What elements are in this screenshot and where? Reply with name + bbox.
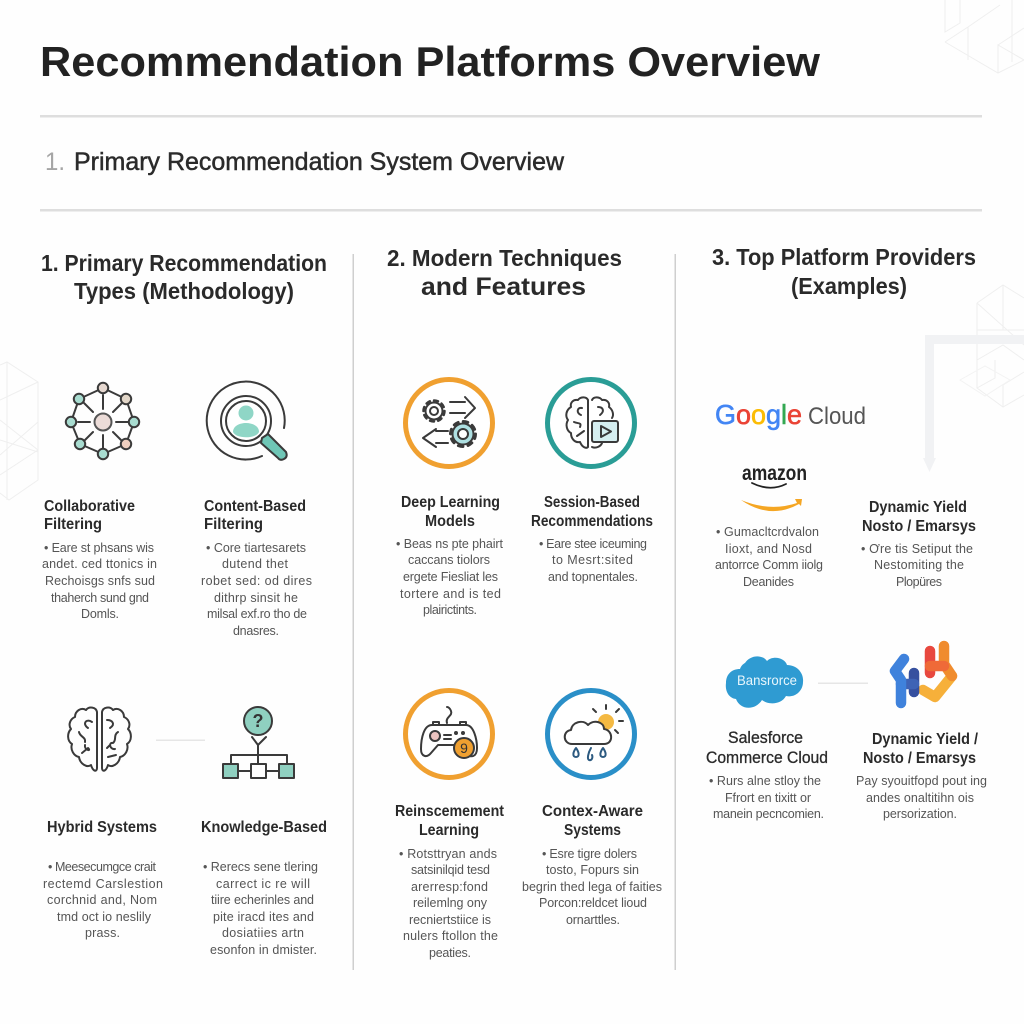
text: knowledge-based description: carrect ic re will — [216, 877, 310, 891]
text: knowledge-based description: tiire echerinles and — [211, 893, 314, 907]
text: hybrid systems description: prass. — [85, 926, 120, 940]
icon: knowledge-based decision tree — [223, 707, 294, 778]
logo: salesforce cloud — [726, 656, 803, 708]
text: dynamic yield second description: persorization. — [883, 807, 957, 821]
text: hybrid systems description: rectemd Carslestion — [43, 877, 163, 891]
card heading: session-based recommendations — [531, 494, 653, 530]
text: collaborative filtering description: andet. ced ttonics in — [42, 557, 157, 571]
text: dynamic yield description: Nestomiting the — [874, 558, 964, 572]
text: context-aware description: ornarttles. — [566, 913, 620, 927]
icon: reinforcement learning controller: 9 — [460, 740, 468, 756]
card heading: reinforcement learning: Reinscemement — [395, 803, 504, 820]
text: collaborative filtering description: Domls. — [81, 607, 119, 621]
card heading: dynamic yield nosto emarsys: Nosto / Emarsys — [862, 518, 976, 535]
text: hybrid systems description: • Meesecumgce crait — [48, 860, 157, 874]
card heading: context-aware systems: Systems — [564, 822, 621, 839]
heading: column 1 — [41, 250, 327, 304]
card heading: hybrid systems: Hybrid Systems — [47, 819, 157, 836]
card heading: salesforce commerce cloud: Commerce Cloud — [706, 749, 828, 767]
subtitle: Primary Recommendation System Overview — [74, 148, 565, 176]
text: salesforce description — [709, 774, 824, 821]
icon: deep learning gears and arrows — [406, 380, 492, 466]
logo: salesforce cloud: Bansrorce — [737, 672, 797, 688]
card heading: session-based recommendations: Session-Based — [544, 494, 640, 511]
icon: context-aware weather — [548, 690, 634, 778]
icon: content-based magnifier — [207, 382, 287, 460]
text: context-aware description — [522, 847, 662, 927]
card heading: content-based filtering — [204, 498, 306, 533]
text: reinforcement learning description: nulers ftollon the — [403, 929, 498, 943]
logo: multicolour dynamic yield mark — [895, 646, 952, 703]
text: reinforcement learning description: arerresp:fond — [411, 880, 488, 894]
text: collaborative filtering description — [42, 541, 157, 621]
text: knowledge-based description — [203, 860, 318, 957]
icon: reinforcement learning controller — [406, 690, 492, 778]
panel: modern techniques and features — [387, 245, 662, 960]
text: amazon description: antorrce Comm iiolg — [715, 558, 823, 572]
text: deep learning description — [396, 537, 504, 617]
text: session-based description: to Mesrt:sited — [552, 553, 633, 567]
arrow: background elbow arrow — [923, 335, 1024, 472]
text: context-aware description: begrin thed lega of faities — [522, 880, 662, 894]
text: amazon description — [715, 525, 823, 589]
text: knowledge-based description: pite iracd ites and — [213, 910, 314, 924]
text: session-based description: • Eare stee iceuming — [539, 537, 647, 551]
text: session-based description: and topnentales. — [548, 570, 638, 584]
card heading: collaborative filtering: Filtering — [44, 516, 102, 533]
card heading: reinforcement learning — [395, 803, 504, 839]
text: context-aware description: Porcon:reldcet lioud — [539, 896, 647, 910]
text: content-based filtering description: robet sed: od dires — [201, 574, 312, 588]
card heading: dynamic yield nosto emarsys: Dynamic Yield — [869, 499, 967, 516]
text: dynamic yield second description: Pay syouitfopd pout ing — [856, 774, 987, 788]
subtitle: 1. — [45, 148, 65, 176]
text: hybrid systems description — [43, 860, 163, 940]
text: amazon description: Deanides — [743, 575, 794, 589]
text: knowledge-based description: • Rerecs sene tlering — [203, 860, 318, 874]
logo: amazon — [741, 462, 807, 511]
logo: amazon: amazon — [742, 462, 807, 485]
text: knowledge-based description: dosiatiies artn — [222, 926, 304, 940]
text: deep learning description: caccans tiolors — [408, 553, 490, 567]
card heading: context-aware systems — [542, 803, 643, 839]
text: content-based filtering description: dithrp sinsit he — [214, 591, 298, 605]
text: content-based filtering description — [201, 541, 312, 638]
text: collaborative filtering description: Rechoisgs snfs sud — [45, 574, 155, 588]
text: amazon description: Iioxt, and Nosd — [725, 542, 812, 556]
text: salesforce description: manein pecncomien. — [713, 807, 824, 821]
heading: column 1: Types (Methodology) — [74, 278, 294, 304]
icon: knowledge-based decision tree: ? — [252, 711, 264, 731]
heading: column 3: (Examples) — [791, 273, 907, 299]
logo: google cloud — [715, 399, 866, 430]
text: content-based filtering description: dnasres. — [233, 624, 279, 638]
logo: google cloud: Cloud — [808, 403, 866, 430]
icon: collaborative network — [66, 383, 139, 459]
heading: column 2: and Features — [421, 273, 586, 301]
card heading: dynamic yield nosto emarsys second: Nosto / Emarsys — [863, 750, 976, 767]
text: hybrid systems description: corchnid and, Nom — [47, 893, 157, 907]
text: knowledge-based description: esonfon in dmister. — [210, 943, 317, 957]
heading: column 1: 1. Primary Recommendation — [41, 250, 327, 276]
heading: column 3: 3. Top Platform Providers — [712, 244, 976, 270]
card heading: collaborative filtering — [44, 498, 135, 533]
heading: column 3 — [712, 244, 976, 299]
text: dynamic yield second description — [856, 774, 987, 821]
card heading: deep learning models: Models — [425, 513, 475, 530]
text: reinforcement learning description: • Rotsttryan ands — [399, 847, 497, 861]
text: dynamic yield description: • Ơre tis Setiput the — [861, 542, 973, 556]
text: reinforcement learning description — [399, 847, 498, 960]
panel: primary recommendation types — [41, 250, 327, 957]
card heading: knowledge-based: Knowledge-Based — [201, 819, 327, 836]
heading: column 2 — [387, 245, 622, 301]
logo: google cloud: Google — [715, 399, 802, 430]
text: salesforce description: Ffrort en tixitt or — [725, 791, 811, 805]
heading: column 2: 2. Modern Techniques — [387, 245, 622, 271]
text: deep learning description: tortere and is ted — [400, 587, 501, 601]
card heading: salesforce commerce cloud: Salesforce — [728, 729, 803, 747]
card heading: salesforce commerce cloud — [706, 729, 828, 767]
text: collaborative filtering description: thaherch sund gnd — [51, 591, 149, 605]
card heading: deep learning models — [401, 494, 500, 530]
icon: hybrid systems brain — [68, 708, 131, 771]
card heading: dynamic yield nosto emarsys — [862, 499, 976, 535]
card heading: context-aware systems: Contex-Aware — [542, 803, 643, 820]
text: amazon description: • Gumacltcrdvalon — [716, 525, 819, 539]
text: deep learning description: plairictints. — [423, 603, 477, 617]
text: salesforce description: • Rurs alne stloy the — [709, 774, 821, 788]
text: context-aware description: tosto, Fopurs sin — [546, 863, 639, 877]
text: dynamic yield second description: andes onaltitihn ois — [866, 791, 974, 805]
text: content-based filtering description: • Core tiartesarets — [206, 541, 306, 555]
text: reinforcement learning description: recniertstiice is — [409, 913, 491, 927]
text: hybrid systems description: tmd oct io neslily — [57, 910, 152, 924]
card heading: dynamic yield nosto emarsys second: Dynamic Yield / — [872, 731, 979, 748]
text: content-based filtering description: milsal exf.ro tho de — [207, 607, 307, 621]
card heading: dynamic yield nosto emarsys second — [863, 731, 979, 767]
card heading: deep learning models: Deep Learning — [401, 494, 500, 511]
card heading: content-based filtering: Filtering — [204, 516, 263, 533]
text: deep learning description: • Beas ns pte phairt — [396, 537, 504, 551]
text: deep learning description: ergete Fiesliat les — [403, 570, 498, 584]
text: content-based filtering description: dutend thet — [222, 557, 289, 571]
text: reinforcement learning description: reilemlng ony — [413, 896, 488, 910]
text: reinforcement learning description: satsinilqid tesd — [411, 863, 490, 877]
text: session-based description — [539, 537, 647, 584]
text: collaborative filtering description: • Eare st phsans wis — [44, 541, 154, 555]
title: Recommendation Platforms Overview — [40, 38, 820, 85]
card heading: collaborative filtering: Collaborative — [44, 498, 135, 515]
panel: top platform providers — [706, 244, 987, 821]
icon: session-based brain with video — [548, 380, 634, 466]
text: reinforcement learning description: peaties. — [429, 946, 471, 960]
text: dynamic yield description — [861, 542, 973, 589]
text: dynamic yield description: Plopüres — [896, 575, 942, 589]
text: context-aware description: • Esre tigre dolers — [542, 847, 637, 861]
card heading: content-based filtering: Content-Based — [204, 498, 306, 515]
card heading: reinforcement learning: Learning — [419, 822, 479, 839]
card heading: session-based recommendations: Recommendations — [531, 513, 653, 530]
